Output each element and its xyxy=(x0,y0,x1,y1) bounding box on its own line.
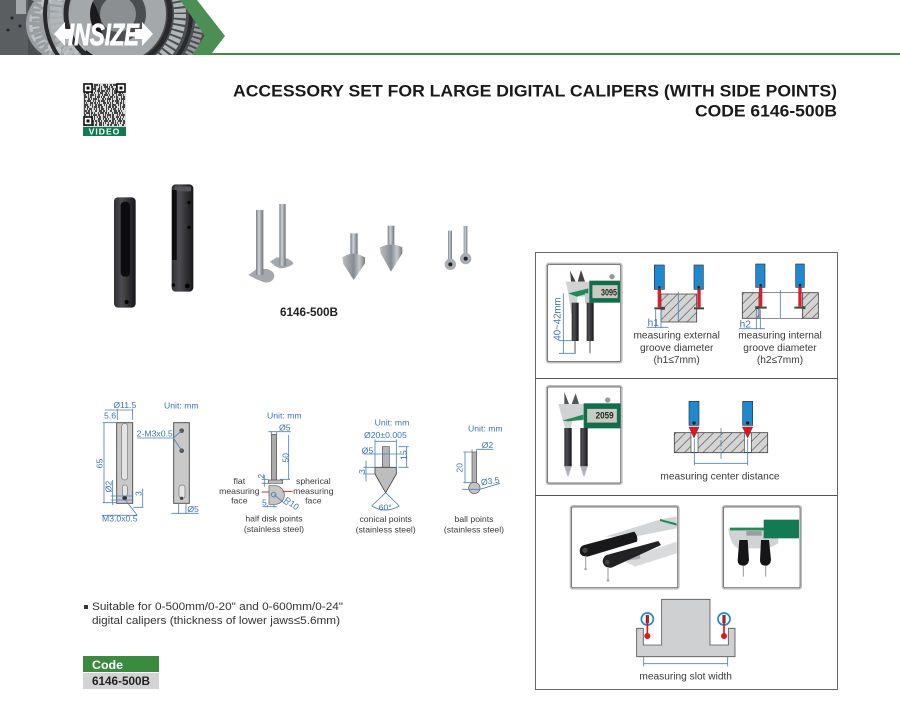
internal groove diagram: measuring internal xyxy=(738,331,822,342)
holder front view: 65 xyxy=(95,459,105,468)
external groove diagram xyxy=(633,265,720,366)
half disk points drawing: face xyxy=(305,496,322,506)
slot width diagram: measuring slot width xyxy=(639,671,732,682)
caliper photo 1: 3095 xyxy=(601,287,617,297)
ball points drawing: ball points xyxy=(455,514,494,524)
unit label: Unit: mm xyxy=(164,401,199,411)
panel row: slot width xyxy=(571,506,801,682)
holder front view: Ø11.5 xyxy=(113,400,136,410)
half disk points drawing: Unit: mm xyxy=(267,410,302,420)
conical points xyxy=(342,226,402,280)
half disk points xyxy=(248,204,293,283)
half disk points drawing: face xyxy=(231,496,248,506)
half disk points drawing: measuring xyxy=(293,486,334,496)
dimension drawing: holder and half disk points xyxy=(95,400,334,534)
QR code with video tag xyxy=(83,83,126,137)
conical points drawing: conical points xyxy=(359,514,413,524)
conical points drawing xyxy=(356,418,416,534)
title: CODE 6146-500B xyxy=(695,102,837,120)
caliper photo 1: 40~42mm xyxy=(552,297,563,341)
installation photo left xyxy=(571,506,679,589)
center distance diagram: measuring center distance xyxy=(660,472,780,483)
half disk points drawing: spherical xyxy=(296,476,331,486)
half disk points drawing: half disk points xyxy=(245,514,303,524)
black holder tubes xyxy=(114,184,193,308)
conical points drawing: (stainless steel) xyxy=(356,524,416,534)
panel row: groove diameter xyxy=(547,264,822,366)
holder side view: Ø5 xyxy=(187,504,199,514)
holder side view: 2-M3x0.5 xyxy=(137,429,173,439)
caliper photo 2: 2059 xyxy=(596,411,614,421)
ball points drawing: (stainless steel) xyxy=(444,524,504,534)
code table xyxy=(83,656,159,689)
header machinery photo xyxy=(0,0,205,55)
caliper photo 1 xyxy=(547,264,622,362)
caliper photo 2 xyxy=(547,386,622,484)
half disk points drawing: (stainless steel) xyxy=(244,524,304,534)
conical points drawing: Unit: mm xyxy=(375,418,409,428)
center distance diagram xyxy=(660,401,780,483)
dimension drawing: conical and ball points xyxy=(356,418,504,534)
half disk points drawing: R10 xyxy=(282,495,301,512)
green chevron xyxy=(180,0,225,55)
title: ACCESSORY SET FOR LARGE DIGITAL CALIPERS (WITH SIDE POINTS) xyxy=(233,82,837,100)
conical points drawing: 60° xyxy=(379,503,392,513)
logo INSIZE: INSIZE xyxy=(68,17,140,52)
half disk points drawing: 50 xyxy=(280,453,290,463)
header banner xyxy=(0,0,900,55)
ball points drawing: Ø2 xyxy=(482,440,493,450)
conical points drawing: 15 xyxy=(399,450,409,460)
internal groove diagram: h2 xyxy=(740,320,751,331)
QR code with video tag: VIDEO xyxy=(89,127,120,137)
ball points xyxy=(445,226,471,270)
suitability note: Suitable for 0-500mm/0-20" and 0-600mm/0-24" xyxy=(92,601,343,613)
ball points drawing: Ø3.5 xyxy=(480,475,500,487)
half disk points drawing xyxy=(219,410,334,534)
title xyxy=(233,82,837,120)
code table: 6146-500B xyxy=(92,674,150,688)
half disk points drawing: 2 xyxy=(256,474,266,479)
installation photo right xyxy=(723,506,801,589)
ball points drawing: Unit: mm xyxy=(468,424,503,434)
half disk points drawing: 5 xyxy=(262,498,267,508)
conical points drawing: 3 xyxy=(357,469,367,474)
holder front view: M3.0x0.5 xyxy=(102,514,138,524)
half disk points drawing: measuring xyxy=(219,486,260,496)
ball points drawing: 20 xyxy=(455,463,465,473)
internal groove diagram: (h2≤7mm) xyxy=(757,355,803,366)
product code label: 6146-500B xyxy=(280,305,338,319)
half disk points drawing: flat xyxy=(234,476,246,486)
panel row: center distance xyxy=(547,386,780,484)
conical points drawing: Ø20±0.005 xyxy=(364,430,407,440)
suitability note: digital calipers (thickness of lower jaws≤5.6mm) xyxy=(92,615,340,627)
external groove diagram: groove diameter xyxy=(640,343,714,354)
conical points drawing: Ø5 xyxy=(362,445,373,455)
suitability note xyxy=(84,601,343,627)
ball points drawing xyxy=(444,424,504,534)
half disk points drawing: Ø5 xyxy=(279,423,291,433)
external groove diagram: h1 xyxy=(648,318,659,329)
holder front view: Ø2 xyxy=(104,481,114,492)
code table: Code xyxy=(92,658,123,672)
external groove diagram: measuring external xyxy=(633,331,720,342)
holder side view xyxy=(137,423,199,514)
slot width diagram xyxy=(637,599,735,682)
holder front view: 5.6 xyxy=(104,411,116,421)
holder front view: 3 xyxy=(133,491,143,496)
holder front view xyxy=(95,400,143,524)
internal groove diagram: groove diameter xyxy=(743,343,817,354)
application panel xyxy=(535,252,838,690)
product photos xyxy=(114,184,471,308)
internal groove diagram xyxy=(738,264,822,366)
external groove diagram: (h1≤7mm) xyxy=(654,355,700,366)
